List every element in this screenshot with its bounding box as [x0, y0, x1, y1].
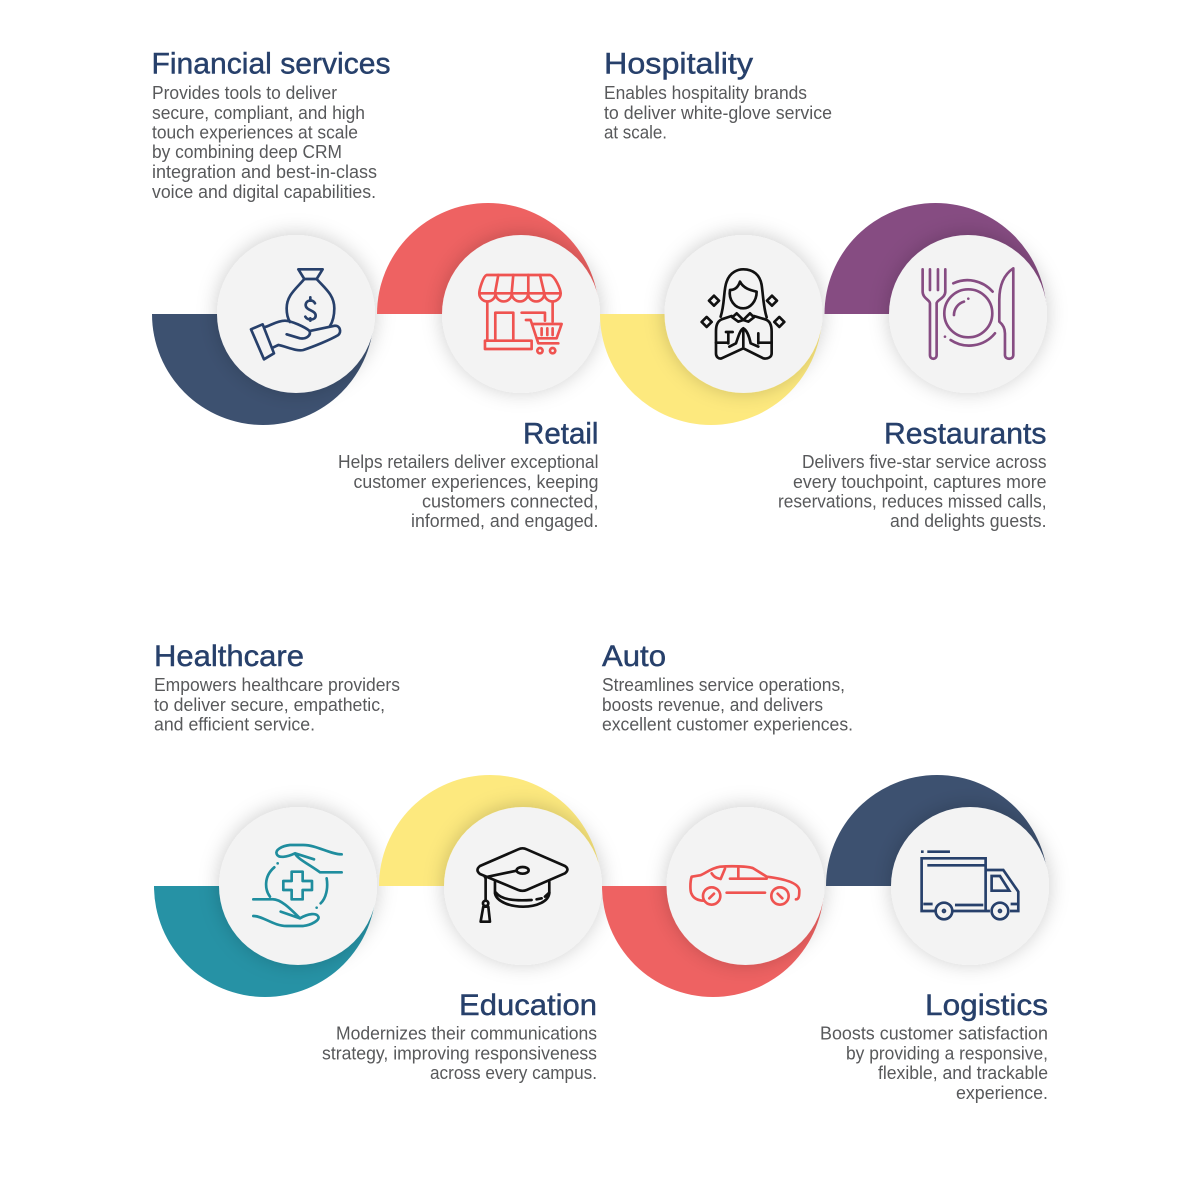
text block: restaurants: every touchpoint, captures more — [793, 472, 1046, 492]
heading: hospitality: Hospitality — [604, 48, 753, 80]
text block: education: strategy, improving responsiveness — [322, 1044, 597, 1064]
text block: auto: excellent customer experiences. — [602, 714, 853, 734]
heading: logistics: Logistics — [925, 989, 1048, 1022]
text block: financial services: by combining deep CRM — [152, 142, 342, 162]
icon: money bag in hand — [251, 269, 340, 359]
half disc: red — [602, 886, 824, 997]
icon circle: auto — [666, 807, 824, 965]
half disc: purple — [824, 203, 1046, 314]
text block: hospitality: Enables hospitality brands — [604, 83, 807, 103]
text block: restaurants: and delights guests. — [890, 511, 1046, 531]
icon circle: retail — [442, 235, 600, 393]
heading: financial services: Financial services — [152, 48, 390, 80]
text block: retail: informed, and engaged. — [411, 511, 598, 531]
half disc: yellow — [600, 314, 822, 425]
icon: greeting hostess — [702, 269, 784, 359]
panel: financial services — [152, 48, 390, 425]
text block: financial services: Provides tools to deliver — [152, 83, 337, 103]
heading: education: Education — [459, 989, 597, 1022]
panel: logistics — [820, 775, 1049, 1103]
text block: retail — [338, 452, 598, 531]
icon: hands with medical cross — [253, 845, 342, 926]
text block: restaurants — [778, 452, 1046, 531]
text block: auto — [602, 675, 853, 734]
text block: financial services — [152, 83, 377, 202]
half disc: teal — [154, 886, 376, 997]
text block: financial services: voice and digital capabilities. — [152, 182, 376, 202]
text block: healthcare: to deliver secure, empathetic, — [154, 695, 385, 715]
text block: financial services: secure, compliant, and high — [152, 103, 365, 123]
icon: store with cart — [479, 275, 562, 353]
text block: healthcare: Empowers healthcare providers — [154, 675, 400, 695]
half disc: navy — [826, 775, 1048, 886]
panel: auto — [602, 640, 853, 997]
text block: education: across every campus. — [430, 1063, 597, 1083]
icon: car — [690, 866, 799, 905]
icon circle: education — [444, 807, 602, 965]
icon circle: healthcare — [219, 807, 377, 965]
half disc: red — [377, 203, 599, 314]
icon circle: hospitality — [664, 235, 822, 393]
text block: financial services: integration and best-in-class — [152, 162, 377, 182]
icon: graduation cap — [477, 848, 567, 922]
text block: education: Modernizes their communications — [336, 1024, 597, 1044]
heading: healthcare: Healthcare — [154, 640, 304, 673]
text block: healthcare: and efficient service. — [154, 714, 315, 734]
panel: hospitality — [600, 48, 832, 425]
text block: restaurants: reservations, reduces missed calls, — [778, 492, 1046, 512]
panel: restaurants — [778, 203, 1047, 531]
text block: education — [322, 1024, 597, 1083]
panel: education — [322, 775, 602, 1083]
heading: restaurants: Restaurants — [884, 418, 1046, 450]
text block: auto: Streamlines service operations, — [602, 675, 845, 695]
icon circle: logistics — [891, 807, 1049, 965]
text block: retail: Helps retailers deliver exceptional — [338, 452, 598, 472]
icon: delivery truck — [921, 852, 1018, 919]
icon circle: restaurants — [889, 235, 1047, 393]
text block: logistics: flexible, and trackable — [878, 1063, 1048, 1083]
half disc: navy — [152, 314, 374, 425]
heading: auto: Auto — [602, 640, 666, 673]
text block: auto: boosts revenue, and delivers — [602, 695, 823, 715]
text block: hospitality: to deliver white-glove service — [604, 103, 832, 123]
text block: retail: customer experiences, keeping — [354, 472, 598, 492]
text block: restaurants: Delivers five-star service across — [802, 452, 1046, 472]
half disc: yellow — [379, 775, 601, 886]
text block: retail: customers connected, — [422, 492, 598, 512]
text block: logistics: experience. — [956, 1083, 1048, 1103]
text block: logistics: by providing a responsive, — [846, 1044, 1048, 1064]
heading: retail: Retail — [523, 418, 598, 450]
panel: retail — [338, 203, 600, 531]
icon: fork plate knife — [923, 268, 1013, 359]
text block: hospitality: at scale. — [604, 122, 667, 142]
text block: healthcare — [154, 675, 400, 734]
text block: logistics: Boosts customer satisfaction — [820, 1024, 1048, 1044]
text block: hospitality — [604, 83, 832, 142]
text block: logistics — [820, 1024, 1048, 1103]
panel: healthcare — [154, 640, 400, 997]
text block: financial services: touch experiences at scale — [152, 122, 358, 142]
icon circle: financial services — [217, 235, 375, 393]
